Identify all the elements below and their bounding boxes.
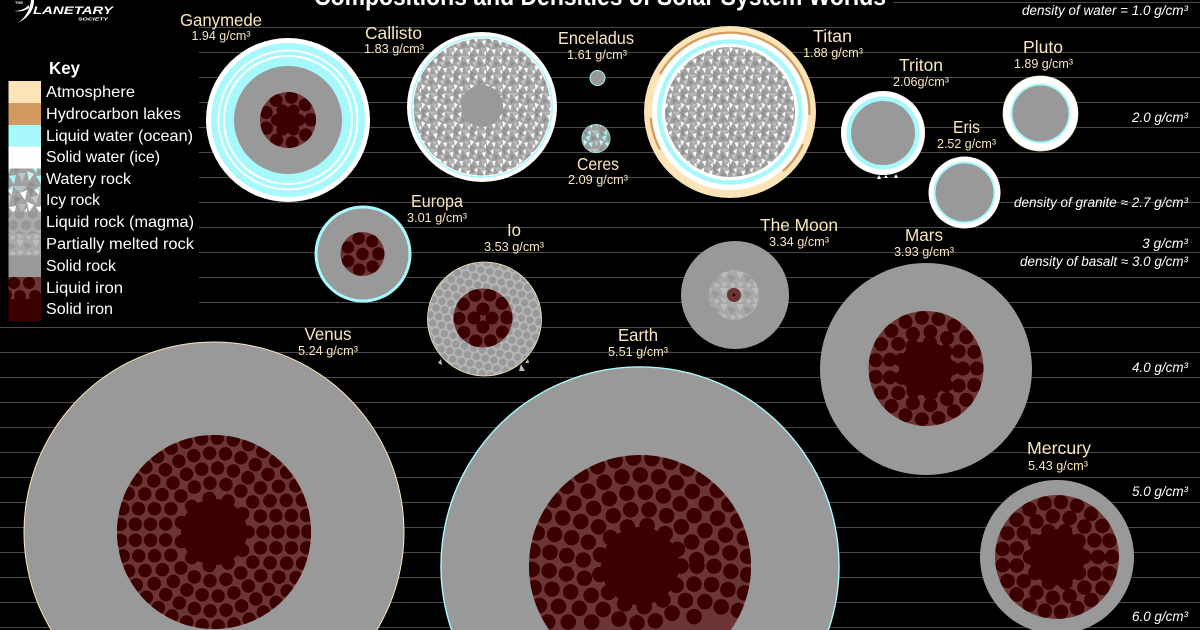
world: Ganymede [180, 10, 370, 202]
world: The Moon: 3.34 g/cm³ [769, 235, 829, 249]
world: Venus: 5.24 g/cm³ [298, 344, 358, 358]
density scale labels: 2.0 g/cm³ [1131, 110, 1188, 125]
key labels: Icy rock [46, 192, 101, 209]
world: Mercury: 5.43 g/cm³ [1028, 459, 1088, 473]
world: Titan: 1.88 g/cm³ [803, 46, 863, 60]
world: Enceladus: 1.61 g/cm³ [567, 48, 627, 62]
world: Mercury: Mercury [1027, 438, 1091, 458]
density scale labels: 4.0 g/cm³ [1132, 360, 1188, 375]
world: Ganymede: 1.94 g/cm³ [192, 29, 250, 43]
key labels: Solid water (ice) [46, 149, 160, 166]
logo: The Planetary Society [14, 0, 115, 23]
world: Europa [314, 191, 467, 302]
density scale labels [1014, 3, 1189, 624]
world: Venus: Venus [304, 324, 352, 344]
density scale labels: 6.0 g/cm³ [1132, 609, 1188, 624]
key labels: Liquid rock (magma) [46, 214, 194, 231]
world: Enceladus: Enceladus [558, 28, 634, 48]
world: Eris [928, 117, 1000, 228]
world: Eris: 2.52 g/cm³ [937, 137, 996, 151]
world: Ceres: Ceres [577, 154, 619, 174]
world: The Moon [681, 215, 838, 349]
world: Triton: 2.06g/cm³ [893, 75, 949, 89]
world: Ganymede: Ganymede [180, 10, 262, 30]
density scale labels: density of granite ≈ 2.7 g/cm³ [1014, 195, 1188, 210]
world: Enceladus [558, 28, 634, 86]
density scale labels: 5.0 g/cm³ [1132, 484, 1188, 499]
world: Venus [24, 324, 404, 630]
key labels: Hydrocarbon lakes [46, 106, 181, 123]
world: Pluto: Pluto [1023, 37, 1063, 57]
world: Mars [820, 225, 1032, 475]
world: Europa: 3.01 g/cm³ [407, 211, 467, 225]
key labels: Solid iron [46, 301, 113, 318]
density scale labels: density of water = 1.0 g/cm³ [1022, 3, 1188, 18]
logo: The Planetary Society: THE [15, 0, 23, 5]
logo: The Planetary Society: LANETARY [33, 5, 115, 17]
key labels: Liquid water (ocean) [46, 128, 193, 145]
key labels: Atmosphere [46, 84, 135, 101]
world: Mars: 3.93 g/cm³ [894, 245, 954, 259]
key heading: Key [49, 58, 80, 78]
world: Earth: Earth [618, 325, 658, 345]
world: Triton [841, 55, 949, 179]
hydrocarbon lakes [651, 33, 809, 171]
world: Titan: Titan [813, 26, 852, 46]
key labels: Liquid iron [46, 280, 123, 297]
world: Ceres: 2.09 g/cm³ [568, 173, 628, 187]
world: Callisto: 1.83 g/cm³ [364, 42, 424, 56]
world: Pluto: 1.89 g/cm³ [1014, 57, 1073, 71]
key swatches [8, 81, 41, 321]
key panel [0, 58, 195, 321]
world: Callisto: Callisto [365, 23, 422, 43]
world: Callisto [364, 23, 557, 182]
logo: The Planetary Society: SOCIETY [78, 16, 109, 22]
world: Earth [441, 325, 839, 630]
density scale labels: 3 g/cm³ [1142, 236, 1189, 251]
world: Io [428, 220, 544, 376]
world: Europa: Europa [411, 191, 463, 211]
world: Titan [644, 26, 863, 198]
density scale labels: density of basalt ≈ 3.0 g/cm³ [1020, 254, 1188, 269]
world: Mercury [980, 438, 1134, 630]
world: Io: 3.53 g/cm³ [484, 240, 544, 254]
key labels: Watery rock [46, 171, 132, 188]
key labels [46, 84, 195, 318]
world: Mars: Mars [905, 225, 943, 245]
world: The Moon: The Moon [760, 215, 838, 235]
world: Io: Io [507, 220, 521, 240]
world: Earth: 5.51 g/cm³ [608, 345, 668, 359]
key labels: Solid rock [46, 258, 117, 275]
world: Eris: Eris [953, 117, 980, 137]
world: Triton: Triton [899, 55, 943, 75]
world: Pluto [1003, 37, 1078, 151]
key labels: Partially melted rock [46, 236, 195, 253]
world: Ceres [568, 124, 628, 187]
